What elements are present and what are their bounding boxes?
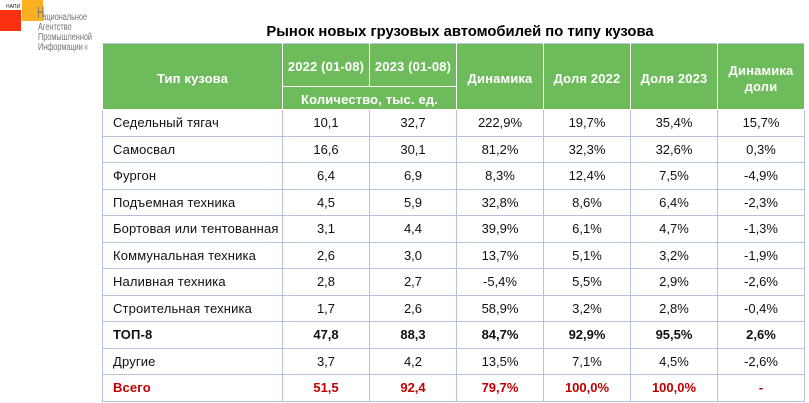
table header: units: Количество, тыс. ед.	[301, 92, 438, 107]
row: Другие: 4,2	[404, 354, 422, 369]
table header: columns: 2023 (01-08)	[375, 59, 451, 74]
row: Строительная техника: 2,8%	[659, 301, 689, 316]
row: Седельный тягач: 35,4%	[656, 115, 692, 130]
row: Самосвал: Самосвал	[113, 142, 175, 157]
row: Строительная техника: Строительная техника	[113, 301, 252, 316]
row: Самосвал: 16,6	[313, 142, 339, 157]
row: ТОП-8: ТОП-8	[113, 327, 152, 342]
row: Седельный тягач: 32,7	[400, 115, 426, 130]
row: Самосвал: 30,1	[400, 142, 426, 157]
row: Седельный тягач: 222,9%	[478, 115, 522, 130]
logo: large initial: Н	[37, 3, 44, 22]
row: Наливная техника: 2,7	[404, 274, 422, 289]
market table	[102, 43, 805, 402]
row: Всего: 92,4	[400, 380, 426, 395]
row: ТОП-8: 2,6%	[746, 327, 776, 342]
row: Седельный тягач: 15,7%	[743, 115, 779, 130]
row: Бортовая или тентованная: -1,3%	[744, 221, 778, 236]
row: Бортовая или тентованная: 39,9%	[482, 221, 518, 236]
row: Фургон: 12,4%	[569, 168, 605, 183]
table header: columns: Динамика	[468, 70, 532, 86]
row: Бортовая или тентованная	[113, 221, 778, 236]
row: Наливная техника: 2,8	[317, 274, 335, 289]
logo: agency name: ациональное	[42, 12, 87, 23]
row: Подъемная техника	[113, 195, 778, 210]
row: Всего	[113, 380, 763, 395]
table header: columns: Доля 2023	[641, 70, 707, 86]
row: Всего: -	[759, 380, 763, 395]
row: Строительная техника: 2,6	[404, 301, 422, 316]
row: Самосвал	[113, 142, 776, 157]
row: Подъемная техника: 32,8%	[482, 195, 518, 210]
row: Фургон: 6,4	[317, 168, 335, 183]
row: ТОП-8: 84,7%	[482, 327, 518, 342]
row: Подъемная техника: 8,6%	[572, 195, 602, 210]
table header: columns: Тип кузова	[157, 70, 228, 86]
row: Другие: 4,5%	[659, 354, 689, 369]
row: Другие: 7,1%	[572, 354, 602, 369]
row: Фургон: Фургон	[113, 168, 156, 183]
row: Подъемная техника: -2,3%	[744, 195, 778, 210]
row: Наливная техника: 2,9%	[659, 274, 689, 289]
row: Всего: 100,0%	[565, 380, 609, 395]
table header: columns: доли	[745, 78, 777, 94]
row: Коммунальная техника	[113, 248, 778, 263]
logo: agency name: Агентство	[38, 22, 72, 33]
row: Бортовая или тентованная: 4,4	[404, 221, 422, 236]
table header: columns: 2022 (01-08)	[288, 59, 364, 74]
row: Подъемная техника: 6,4%	[659, 195, 689, 210]
row: Коммунальная техника: Коммунальная техника	[113, 248, 256, 263]
row: ТОП-8	[113, 327, 776, 342]
row: Подъемная техника: 4,5	[317, 195, 335, 210]
row: Наливная техника: -5,4%	[483, 274, 517, 289]
row: Другие: 13,5%	[482, 354, 518, 369]
row: Наливная техника: Наливная техника	[113, 274, 226, 289]
table header: columns: Доля 2022	[554, 70, 620, 86]
row: Седельный тягач: 10,1	[313, 115, 339, 130]
row: ТОП-8: 92,9%	[569, 327, 605, 342]
logo: small caption: НАПИ	[6, 4, 20, 10]
table header: columns: Динамика	[729, 62, 793, 78]
logo: agency name: Промышленной	[38, 32, 92, 43]
logo	[0, 0, 92, 53]
row: Фургон: 6,9	[404, 168, 422, 183]
row: Самосвал: 32,6%	[656, 142, 692, 157]
row: Другие: 3,7	[317, 354, 335, 369]
row: Другие	[113, 354, 778, 369]
row: Фургон: 8,3%	[485, 168, 515, 183]
row: Другие: Другие	[113, 354, 156, 369]
row: Коммунальная техника: 3,0	[404, 248, 422, 263]
row: Самосвал: 32,3%	[569, 142, 605, 157]
row: Строительная техника: 58,9%	[482, 301, 518, 316]
row: ТОП-8: 95,5%	[656, 327, 692, 342]
row: Строительная техника: -0,4%	[744, 301, 778, 316]
row: Бортовая или тентованная: Бортовая или тентованная	[113, 221, 279, 236]
row: Подъемная техника: 5,9	[404, 195, 422, 210]
row: ТОП-8: 47,8	[313, 327, 339, 342]
row: ТОП-8: 88,3	[400, 327, 426, 342]
row: Фургон: -4,9%	[744, 168, 778, 183]
row: Седельный тягач: 19,7%	[569, 115, 605, 130]
row: Седельный тягач	[113, 115, 779, 130]
row: Всего: 100,0%	[652, 380, 696, 395]
row: Фургон: 7,5%	[659, 168, 689, 183]
row: Бортовая или тентованная: 6,1%	[572, 221, 602, 236]
row: Подъемная техника: Подъемная техника	[113, 195, 235, 210]
logo: agency name	[38, 12, 92, 53]
row: Коммунальная техника: 5,1%	[572, 248, 602, 263]
logo: orange square	[22, 0, 43, 21]
row: Фургон	[113, 168, 778, 183]
row: Всего: 79,7%	[482, 380, 518, 395]
row: Самосвал: 81,2%	[482, 142, 518, 157]
row: Коммунальная техника: 13,7%	[482, 248, 518, 263]
row: Всего: Всего	[113, 380, 151, 395]
row: Коммунальная техника: 3,2%	[659, 248, 689, 263]
row: Строительная техника: 3,2%	[572, 301, 602, 316]
row: Наливная техника: -2,6%	[744, 274, 778, 289]
row: Строительная техника: 1,7	[317, 301, 335, 316]
row: Бортовая или тентованная: 3,1	[317, 221, 335, 236]
row: Наливная техника	[113, 274, 778, 289]
row: Коммунальная техника: -1,9%	[744, 248, 778, 263]
logo: red square	[0, 10, 21, 31]
logo: agency name: Информации ®	[38, 42, 88, 53]
title: Рынок новых грузовых автомобилей по типу кузова	[266, 24, 654, 40]
row: Бортовая или тентованная: 4,7%	[659, 221, 689, 236]
row: Седельный тягач: Седельный тягач	[113, 115, 219, 130]
row: Другие: -2,6%	[744, 354, 778, 369]
table header: columns	[103, 44, 804, 395]
row: Коммунальная техника: 2,6	[317, 248, 335, 263]
row: Всего: 51,5	[313, 380, 339, 395]
row: Строительная техника	[113, 301, 778, 316]
row: Самосвал: 0,3%	[746, 142, 776, 157]
row: Наливная техника: 5,5%	[572, 274, 602, 289]
